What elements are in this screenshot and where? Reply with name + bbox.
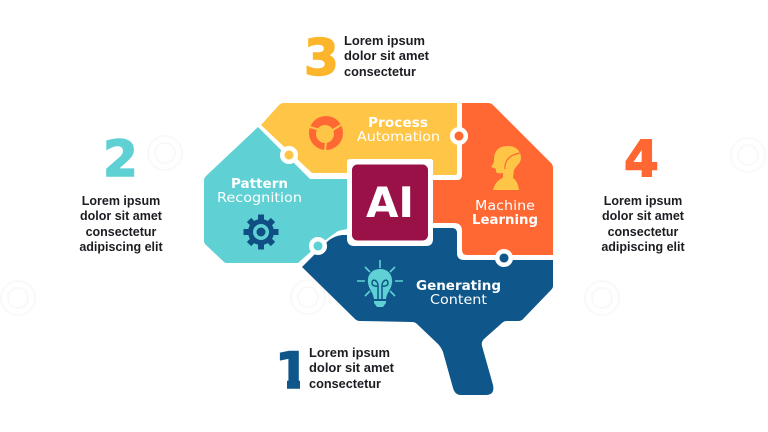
text block 1 [309, 346, 395, 391]
text block 2: adipiscing elit [79, 240, 164, 254]
number 1: 1 [275, 342, 310, 400]
icon: light bulb [357, 260, 403, 307]
text block 3: consectetur [344, 65, 416, 79]
text block 2: consectetur [86, 225, 157, 239]
panel: machine learning (orange) [433, 103, 553, 255]
number 3: 3 [304, 29, 339, 87]
panel: pattern recognition (teal) [204, 127, 347, 263]
panel: generating content (blue) [302, 228, 553, 395]
label: Machine Learning: Learning [472, 213, 538, 228]
connector: blue to orange [497, 251, 511, 265]
text block 4 [601, 194, 686, 254]
text block 3 [344, 34, 430, 79]
label: Pattern Recognition: Recognition [217, 191, 302, 206]
label: AI: AI [366, 178, 414, 227]
text block 2: dolor sit amet [80, 209, 163, 223]
label: Process Automation: Process [368, 116, 428, 131]
label: Machine Learning [472, 199, 538, 228]
text block 1: dolor sit amet [309, 361, 395, 375]
text block 2: Lorem ipsum [82, 194, 160, 208]
text block 3: dolor sit amet [344, 49, 430, 63]
text block 3: Lorem ipsum [344, 34, 425, 48]
text block 1: Lorem ipsum [309, 346, 390, 360]
connector: teal to blue [311, 239, 325, 253]
label: Pattern Recognition: Pattern [231, 177, 288, 192]
connector: yellow to teal [282, 148, 296, 162]
text block 4: consectetur [608, 225, 679, 239]
connector: orange to yellow [452, 129, 466, 143]
panel: process automation (yellow) [261, 103, 457, 175]
infographic canvas [80, 36, 684, 395]
label: Pattern Recognition [217, 177, 302, 206]
label: Process Automation [357, 116, 440, 145]
label: Generating Content: Content [430, 293, 487, 308]
panel: AI core [350, 162, 430, 243]
text block 1: consectetur [309, 377, 381, 391]
text block 4: Lorem ipsum [604, 194, 682, 208]
label: Machine Learning: Machine [475, 199, 535, 214]
icon: robot head profile [491, 146, 521, 190]
label: Process Automation: Automation [357, 130, 440, 145]
icon: process cycle [309, 116, 343, 151]
text block 2 [79, 194, 164, 254]
text block 4: adipiscing elit [601, 240, 686, 254]
label: Generating Content: Generating [416, 279, 501, 294]
number 4: 4 [624, 130, 659, 188]
label: Generating Content [416, 279, 501, 308]
icon: gear [244, 214, 278, 250]
text block 4: dolor sit amet [602, 209, 685, 223]
number 2: 2 [103, 130, 138, 188]
